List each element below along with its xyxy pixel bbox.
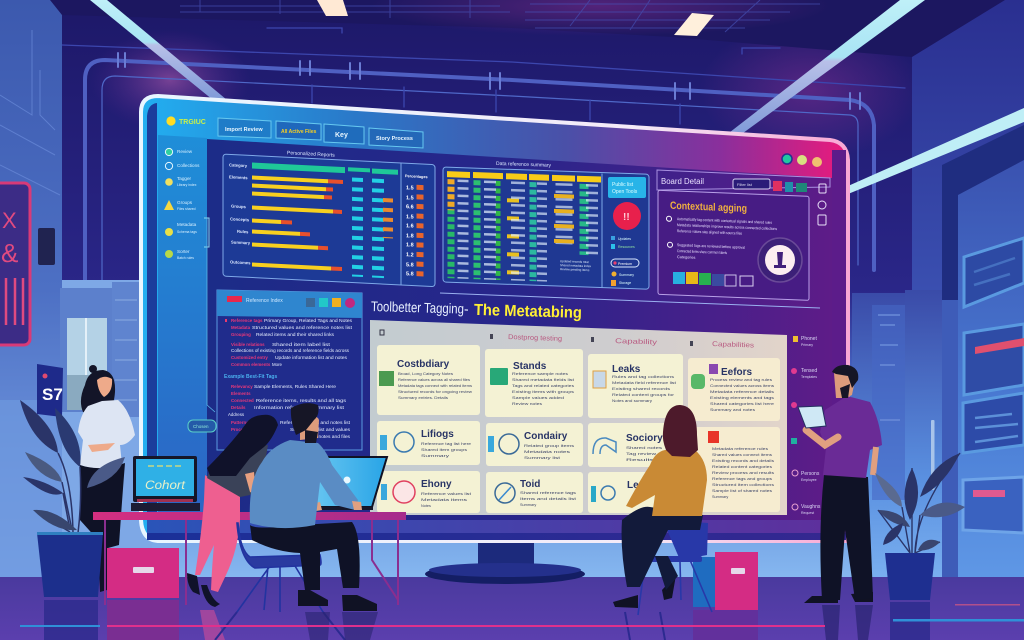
- left sidebar menu: Metadata: [177, 222, 197, 227]
- bottom bezel band: [147, 520, 846, 540]
- text panel body: Relevancy: [231, 384, 253, 389]
- text panel body: Structured values and reference notes list: [252, 325, 353, 330]
- left laptop: [131, 456, 200, 511]
- side widgets: Public list: [612, 182, 634, 188]
- left laptop: Cohort: [145, 478, 186, 492]
- right legend strip: Phonet: [801, 336, 817, 342]
- mini figures column: 6.6: [406, 204, 414, 211]
- ceiling: [50, 0, 1005, 57]
- sheet column headers: Capability: [615, 338, 658, 346]
- right panel header: [657, 170, 830, 192]
- text panel body: Collections of existing records and reference fields across: [231, 348, 350, 353]
- card row one: [377, 345, 780, 421]
- right legend strip: Primary: [801, 343, 813, 347]
- contextual tagging box: Contextual agging: [670, 200, 747, 215]
- mini figures column: 1.8: [406, 233, 414, 240]
- text panel body: Information reference summary list: [254, 405, 345, 410]
- mini figures column: 1.5: [406, 185, 414, 192]
- text panel body: Primary Group, Related Tags and Notes: [264, 318, 353, 323]
- card body text: Existing elements and tags: [710, 396, 774, 400]
- right legend strip: Employee: [801, 478, 817, 482]
- sidebar background: [158, 135, 207, 520]
- card body text: Structured records for ongoing review: [398, 390, 472, 394]
- top tabs: Import Review: [225, 127, 263, 133]
- card body text: Summary: [712, 495, 728, 499]
- text panel body: Shared item list and values: [290, 427, 351, 432]
- left sidebar menu: [164, 148, 209, 260]
- mini figures column: 5.8: [406, 271, 414, 278]
- left sidebar menu: Batch rules: [177, 256, 194, 260]
- card body text: Shared item groups: [421, 448, 467, 452]
- card body text: Metadata reference rules: [712, 447, 768, 451]
- card body text: Summary entries. Details: [398, 396, 448, 400]
- card body text: Summary: [520, 503, 536, 507]
- right legend strip: Vaughns: [801, 504, 821, 510]
- window control dots: [782, 154, 822, 167]
- data table panel: [443, 159, 649, 289]
- text panel body: Shared item label list: [272, 342, 331, 347]
- side widgets: [608, 177, 646, 286]
- sheet column headers: Capabilities: [712, 341, 755, 349]
- contextual tagging box: Reference values stay aligned with source files: [677, 229, 742, 236]
- table headers: [447, 171, 601, 183]
- tag color squares: [673, 272, 753, 286]
- side widgets: Open Tools: [612, 189, 638, 195]
- right panel icons: [818, 184, 826, 225]
- right legend strip: Persons: [801, 471, 820, 477]
- card body text: Summary list: [524, 456, 562, 460]
- purple wall glow left: [90, 30, 250, 130]
- sheet column headers: Dostprog testing: [508, 334, 562, 343]
- text panel body: Address: [228, 412, 245, 417]
- wall sign S7: [37, 364, 63, 417]
- section divider: [440, 293, 820, 308]
- text panel body: Update information list and notes: [275, 355, 348, 360]
- card body text: Results: [626, 458, 654, 462]
- lower left wall and window area: [0, 280, 152, 580]
- card titles: [397, 359, 753, 491]
- text panel body: Grouping: [231, 332, 251, 337]
- neon sign on left wall: [0, 183, 30, 345]
- right panel header: Filter list: [737, 182, 753, 187]
- left bezel strip: [147, 103, 157, 520]
- contextual tagging box: Categories: [677, 255, 695, 260]
- card body text: Metadata field reference list: [612, 381, 677, 385]
- right bezel strip: [832, 150, 846, 520]
- card body text: Reference values list: [421, 492, 472, 496]
- red bar tips: [281, 177, 343, 271]
- card body text: Shared reference tags: [520, 491, 576, 495]
- monitor stand: [425, 541, 585, 584]
- right legend strip: Request: [801, 511, 814, 515]
- text panel body: Reference details and notes list: [280, 420, 351, 425]
- left sidebar menu: Schema tags: [177, 230, 197, 234]
- card body text: Structured item collections: [712, 483, 774, 487]
- card body text: Shared values connect items: [712, 453, 772, 457]
- top tabs: Story Process: [376, 136, 413, 142]
- text panel body: Reference items, results and all tags: [256, 398, 347, 403]
- text panel body: Related items and their shared links: [256, 332, 335, 337]
- mini figures column: 1.5: [406, 214, 414, 221]
- report panel with bar chart: Groups: [231, 203, 247, 209]
- neon sign on left wall: &: [1, 238, 18, 268]
- pink box right: [693, 552, 758, 610]
- sidebar chosen pill: Chosen: [193, 424, 209, 429]
- card titles: Sociory: [626, 433, 663, 444]
- main screen background: [207, 139, 832, 520]
- report panel with bar chart: Personalized Reports: [287, 150, 335, 159]
- monitor frame: [141, 96, 848, 541]
- card body text: Sample values added: [512, 396, 564, 400]
- card titles: Lea: [627, 480, 645, 491]
- card body text: Review process and results: [712, 471, 774, 475]
- text panel body: Visible relations: [231, 342, 265, 347]
- report panel with bar chart: Concepts: [230, 216, 250, 222]
- report panel with bar chart: Elements: [229, 174, 248, 180]
- right panel header: Board Detail: [661, 177, 704, 186]
- card titles: Condairy: [524, 431, 568, 442]
- card row two: [377, 421, 780, 512]
- card body text: Summary: [421, 454, 449, 458]
- card titles: Eefors: [721, 367, 753, 378]
- card titles: Lifiogs: [421, 429, 454, 440]
- contextual tagging box: Connected items share common labels: [677, 249, 727, 255]
- person: standing woman left: [78, 365, 135, 592]
- metadata table sheet: [370, 320, 787, 515]
- right legend strip: [791, 336, 821, 515]
- card body text: Metadata reference details: [710, 390, 774, 394]
- card body text: Related group items: [524, 444, 574, 448]
- card body text: Summary and notes: [710, 408, 755, 412]
- card body text: Items and details list: [520, 497, 578, 501]
- text panel body: More: [272, 362, 283, 367]
- card body text: Tag review: [626, 452, 656, 456]
- contextual tagging box: [658, 190, 809, 300]
- text panel body: Connected: [231, 398, 254, 403]
- side widgets: Summary: [619, 273, 634, 277]
- data table panel: Shared metadata index: [560, 263, 592, 268]
- card titles: Costbdiary: [397, 359, 450, 370]
- main section heading: -: [464, 301, 469, 317]
- pink box left: [107, 548, 179, 598]
- card body text: Reference tags and groups: [712, 477, 772, 481]
- card body text: Existing items with groups: [512, 390, 574, 394]
- card body text: Shared notes: [626, 446, 662, 450]
- left sidebar menu: Sorter: [177, 249, 190, 254]
- card body text: Metadata tags connect with related items: [398, 384, 472, 388]
- neon sign on left wall: X: [2, 208, 17, 233]
- mini figures column: 1.5: [406, 195, 414, 202]
- right plant: [875, 453, 965, 553]
- card body text: Connected values across items: [710, 384, 774, 388]
- report panel with bar chart: Outcomes: [230, 259, 251, 265]
- cyan columns: [352, 178, 363, 277]
- dial gauge: [758, 238, 802, 282]
- sheet column headers: [380, 330, 755, 349]
- text panel body: Common elements: [231, 362, 271, 367]
- right diagonal light beam: [725, 0, 925, 136]
- text panel body: Details: [231, 405, 246, 410]
- floor: [0, 577, 1024, 640]
- lower left text panel: Reference Index: [246, 298, 283, 304]
- logo: TRGIUC: [179, 119, 206, 126]
- report panel with bar chart: Rules: [237, 229, 249, 234]
- mini figures column: 1.8: [406, 242, 414, 249]
- card body text: Tags and related categories: [512, 384, 574, 388]
- report panel with bar chart: Category: [229, 162, 248, 168]
- card body text: Notes: [421, 504, 431, 508]
- card body text: Review notes: [512, 402, 542, 406]
- right wall: [852, 0, 1024, 580]
- right laptop: [305, 457, 387, 510]
- right legend strip: Tensed: [801, 368, 817, 374]
- card body text: Rules and tag collections: [612, 375, 674, 379]
- person: standing man with tablet: [798, 365, 882, 603]
- person: seated woman: [613, 405, 707, 608]
- person: leaning woman: [187, 415, 278, 607]
- chair: seated man: [237, 523, 323, 612]
- side widgets: Resources: [618, 245, 635, 249]
- report panel with bar chart: Summary: [231, 239, 251, 245]
- card titles: Toid: [520, 479, 540, 490]
- card body text: [398, 372, 774, 508]
- text panel body: Metadata: [231, 325, 251, 330]
- left plant pot: [37, 532, 103, 597]
- data table panel: Data reference summary: [496, 161, 552, 169]
- main section heading: Toolbetter Tagging: [371, 298, 464, 317]
- left plant: [20, 400, 125, 533]
- side widgets: Storage: [619, 281, 631, 285]
- data table panel: Updated records total: [560, 259, 589, 264]
- card body text: Existing shared records: [612, 387, 670, 391]
- contextual tagging box: Metadata relationships improve results across connected collections: [677, 223, 777, 231]
- text panel body: Elements: [231, 391, 251, 396]
- floor light lines: [20, 604, 1024, 627]
- text panel header: [217, 290, 362, 318]
- text panel body: Patterns: [231, 420, 249, 425]
- card body text: Related content categories: [712, 465, 772, 469]
- top tabs: Key: [335, 132, 348, 139]
- ceiling light left: [317, 0, 348, 16]
- contextual tagging box: Suggested tags are reviewed before approval: [677, 243, 745, 250]
- left sidebar menu: Library index: [177, 183, 197, 187]
- ceiling light right: [674, 13, 714, 36]
- card body text: Metadata notes: [524, 450, 570, 454]
- card body text: Sample list of shared notes: [712, 489, 772, 493]
- top tabs: All Active Files: [281, 129, 317, 135]
- card body text: Notes and summary: [612, 399, 652, 403]
- card body text: Process review and tag rules: [710, 378, 772, 382]
- text panel body: Sample Elements, Rules Shared Here: [254, 384, 337, 389]
- card row three: [377, 471, 660, 513]
- card body text: Shared metadata fields list: [512, 378, 575, 382]
- sidebar chosen pill: [188, 420, 216, 432]
- wall device: [38, 228, 55, 265]
- right side light strip: [848, 108, 1024, 194]
- side widgets: !!: [623, 212, 630, 223]
- orange column segments: [383, 198, 393, 238]
- mini figures column: 1.2: [406, 252, 414, 259]
- pipes on back wall: [62, 28, 905, 300]
- card body text: Reference values across all shared files: [398, 378, 470, 382]
- text panel body: Process: [231, 427, 249, 432]
- person: seated man: [250, 403, 377, 611]
- mini figures column: 5.8: [406, 262, 414, 269]
- top green bars: [252, 162, 398, 176]
- card body text: Reference sample notes: [512, 372, 568, 376]
- left sidebar menu: Files shared: [177, 207, 196, 211]
- right legend strip: Templates: [801, 375, 817, 379]
- chair: seated woman: [638, 522, 712, 615]
- table colored cells: [448, 179, 454, 278]
- card titles: Leaks: [612, 364, 641, 375]
- left diagonal light beam: [90, 0, 227, 100]
- yellow bars: [252, 176, 333, 271]
- card body text: Metadata items: [421, 498, 467, 502]
- left sidebar menu: Groups: [177, 200, 193, 205]
- logo: [166, 116, 206, 126]
- monitor: [141, 96, 848, 541]
- table text rows: [458, 180, 468, 279]
- left sidebar menu: Review: [177, 149, 193, 154]
- side widgets: Updates: [618, 237, 631, 241]
- left sidebar menu: Tagger: [177, 176, 192, 181]
- top tabs: [218, 118, 423, 148]
- main section heading: [371, 298, 582, 322]
- lower left text panel: [217, 290, 362, 450]
- mini figures column: 1.6: [406, 223, 414, 230]
- card body text: Shared categories list here: [710, 402, 774, 406]
- contextual tagging box: Automatically tag content with contextual signals and shared rules: [677, 217, 772, 225]
- card titles: Ehony: [421, 479, 452, 490]
- side widgets: Premium: [618, 262, 632, 266]
- right plant pot: [885, 553, 935, 600]
- wall sign S7: S7: [42, 385, 63, 404]
- left sidebar menu: Collections: [177, 163, 200, 168]
- mini figures column: [405, 174, 428, 278]
- mini figures column: Percentages: [405, 174, 428, 179]
- text panel body: Reference tags: [231, 318, 263, 323]
- main section heading: The Metatabing: [474, 302, 582, 322]
- report panel with bar chart: [223, 147, 435, 287]
- desk: [93, 512, 406, 605]
- card titles: Stands: [513, 361, 547, 372]
- purple wall glow right: [700, 20, 920, 160]
- card icons: [379, 364, 719, 503]
- left wall: [0, 0, 62, 580]
- card body text: Related content groups for: [612, 393, 675, 397]
- card body text: Reference tag list here: [421, 442, 471, 446]
- data table panel: Review pending items: [560, 267, 590, 272]
- text panel body: [224, 318, 353, 439]
- floor reflections: [44, 600, 930, 640]
- card body text: Broad, Long Category Notes: [398, 372, 453, 376]
- text panel body: Customized entry: [231, 355, 268, 360]
- text panel body: Storage notes and files: [300, 434, 351, 439]
- server panels: [963, 238, 1024, 533]
- text panel body: Example Best-Fit Tags: [224, 374, 277, 380]
- card body text: Existing records and details: [712, 459, 774, 463]
